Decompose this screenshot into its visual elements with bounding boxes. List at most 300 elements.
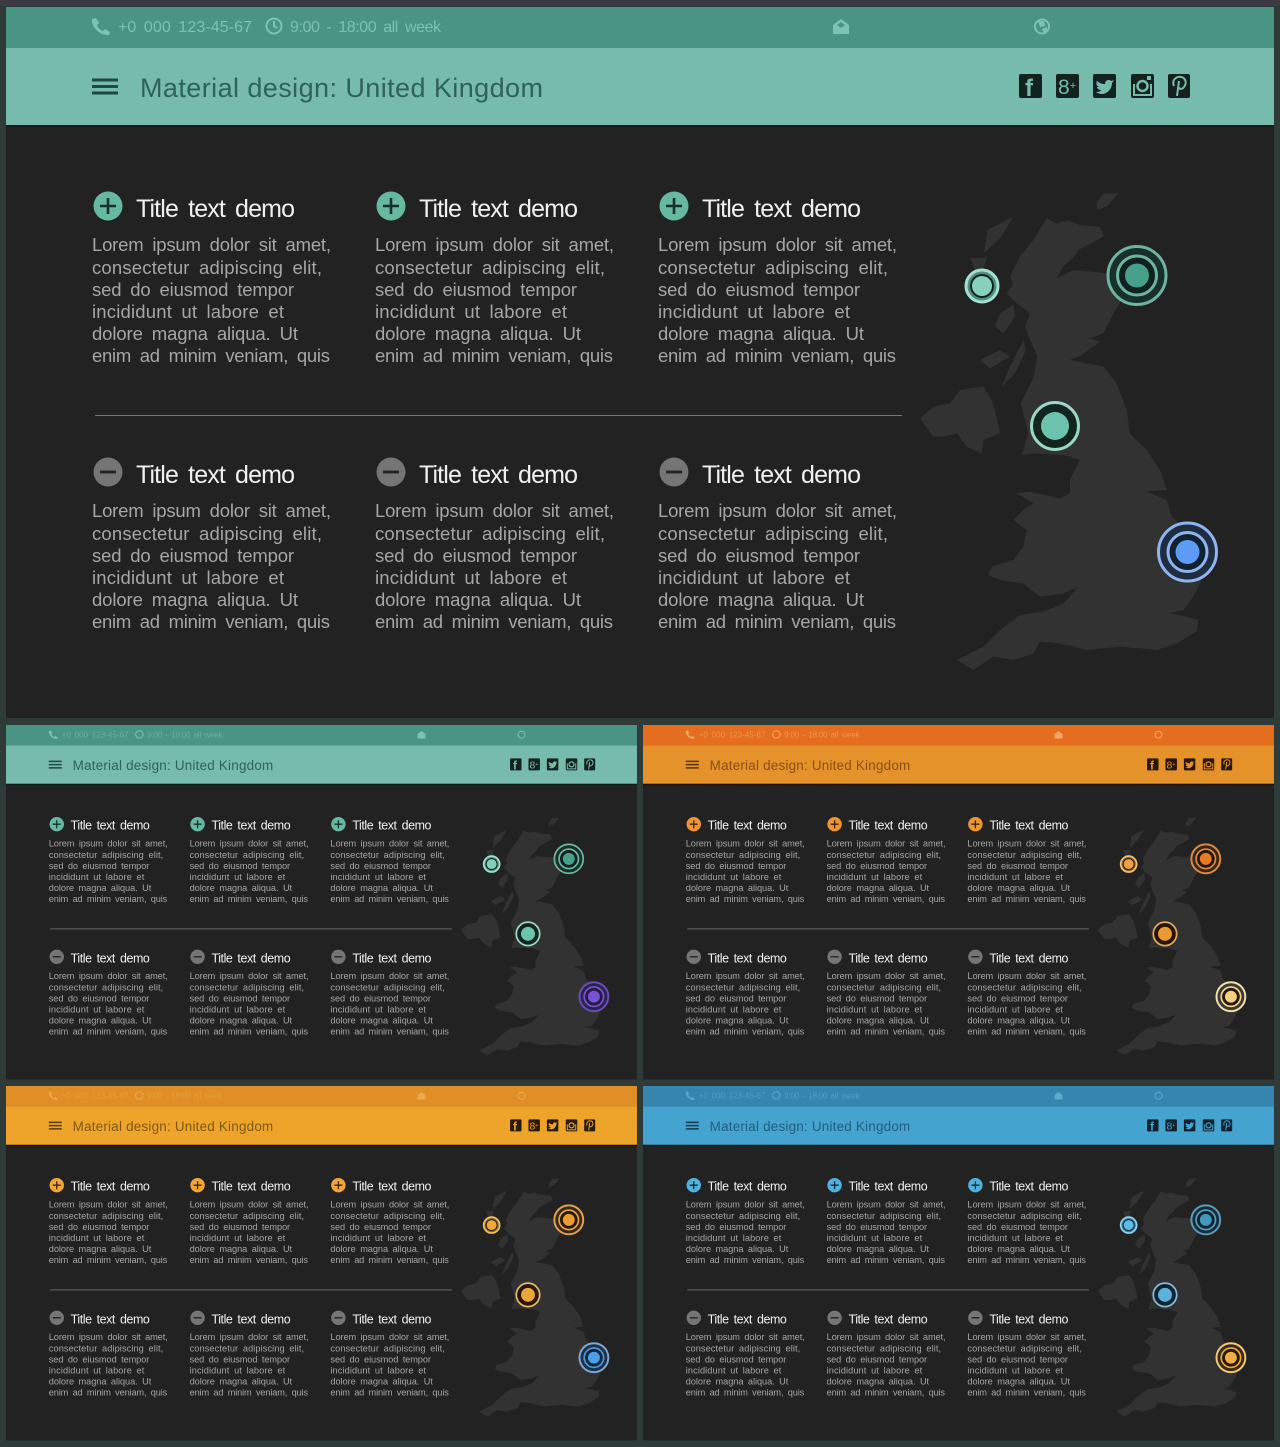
- text block: row 1 col 3: sed do eiusmod tempor: [330, 861, 431, 871]
- text block: row 2 col 1: dolore magna aliqua. Ut: [686, 1377, 789, 1387]
- header bar: Material design: United Kingdom: [73, 1119, 273, 1134]
- text block: row 2 col 1: sed do eiusmod tempor: [49, 994, 149, 1004]
- text block: row 1 col 3: incididunt ut labore et: [330, 872, 426, 882]
- text block: row 1 col 2: consectetur adipiscing elit,: [375, 257, 605, 278]
- text block: row 1 col 2: [190, 1178, 309, 1265]
- text block: row 2 col 3: incididunt ut labore et: [967, 1005, 1063, 1015]
- text block: row 2 col 3: enim ad minim veniam, quis: [967, 1388, 1086, 1398]
- text block: row 2 col 1: dolore magna aliqua. Ut: [686, 1016, 789, 1026]
- text block: row 1 col 1: incididunt ut labore et: [92, 301, 284, 322]
- text block: row 2 col 2: sed do eiusmod tempor: [827, 1355, 927, 1365]
- text block: row 1 col 2: [827, 1178, 946, 1265]
- text block: row 2 col 2: incididunt ut labore et: [190, 1005, 286, 1015]
- text block: row 1 col 2: incididunt ut labore et: [190, 872, 286, 882]
- text block: row 1 col 2: dolore magna aliqua. Ut: [375, 323, 581, 344]
- text block: row 2 col 2: enim ad minim veniam, quis: [827, 1027, 945, 1037]
- text block: row 2 col 1: consectetur adipiscing elit,: [49, 983, 163, 993]
- top contact bar: [643, 1086, 1274, 1106]
- text block: row 2 col 1: consectetur adipiscing elit,: [92, 523, 322, 544]
- text block: row 2 col 2: [827, 950, 946, 1037]
- text block: row 1 col 1: enim ad minim veniam, quis: [49, 1255, 168, 1265]
- text block: row 1 col 2: Title text demo: [849, 819, 928, 833]
- text block: row 1 col 1: dolore magna aliqua. Ut: [92, 323, 298, 344]
- text block: row 1 col 1: consectetur adipiscing elit,: [686, 1211, 800, 1221]
- text block: row 1 col 3: dolore magna aliqua. Ut: [967, 1244, 1070, 1254]
- text block: row 2 col 3: incididunt ut labore et: [330, 1005, 426, 1015]
- text block: row 2 col 3: sed do eiusmod tempor: [330, 1355, 431, 1365]
- panel: small amber slide: [6, 1086, 637, 1440]
- map markers: [484, 1205, 608, 1372]
- text block: row 2 col 1: Title text demo: [71, 951, 150, 965]
- text block: row 1 col 3: Title text demo: [989, 819, 1069, 833]
- text block: row 1 col 2: Title text demo: [419, 195, 578, 223]
- text block: row 2 col 1: dolore magna aliqua. Ut: [92, 589, 298, 610]
- text block: row 1 col 3: [658, 192, 897, 366]
- text block: row 2 col 2: [190, 950, 309, 1037]
- text block: row 2 col 1: [92, 458, 331, 632]
- text block: row 2 col 1: incididunt ut labore et: [686, 1366, 782, 1376]
- text block: row 2 col 1: incididunt ut labore et: [49, 1005, 145, 1015]
- text block: row 2 col 2: sed do eiusmod tempor: [190, 1355, 290, 1365]
- text block: row 1 col 2: dolore magna aliqua. Ut: [827, 883, 930, 893]
- text block: row 2 col 1: Title text demo: [708, 1312, 787, 1326]
- text block: row 1 col 3: Lorem ipsum dolor sit amet,: [967, 839, 1086, 849]
- text block: row 2 col 1: incididunt ut labore et: [92, 567, 284, 588]
- marker: East Anglia: [1158, 523, 1216, 581]
- text block: row 2 col 1: enim ad minim veniam, quis: [686, 1388, 805, 1398]
- text block: row 2 col 2: Title text demo: [849, 951, 928, 965]
- text block: row 1 col 2: Lorem ipsum dolor sit amet,: [190, 1200, 309, 1210]
- header bar: [6, 745, 637, 785]
- text block: row 1 col 1: Lorem ipsum dolor sit amet,: [49, 839, 168, 849]
- text block: row 2 col 3: Lorem ipsum dolor sit amet,: [330, 1332, 449, 1342]
- text block: row 1 col 3: incididunt ut labore et: [967, 1233, 1063, 1243]
- map of United Kingdom: [1098, 818, 1238, 1056]
- header bar: [6, 48, 1274, 127]
- text block: row 2 col 2: consectetur adipiscing elit,: [375, 523, 605, 544]
- text block: row 1 col 2: dolore magna aliqua. Ut: [190, 1244, 293, 1254]
- text block: row 2 col 3: consectetur adipiscing elit,: [967, 983, 1082, 993]
- text block: row 2 col 2: Title text demo: [419, 461, 578, 489]
- text block: row 2 col 3: [967, 1311, 1086, 1398]
- text block: row 1 col 2: Lorem ipsum dolor sit amet,: [827, 839, 946, 849]
- text block: row 1 col 3: dolore magna aliqua. Ut: [330, 1244, 433, 1254]
- text block: row 2 col 2: Lorem ipsum dolor sit amet,: [827, 971, 946, 981]
- text block: row 1 col 3: consectetur adipiscing elit,: [967, 1211, 1082, 1221]
- panel: small orange slide: [643, 725, 1274, 1079]
- social icons: +: [1172, 1123, 1175, 1129]
- social icons: 8: [1166, 760, 1172, 771]
- text block: row 2 col 2: sed do eiusmod tempor: [190, 994, 290, 1004]
- text block: row 2 col 3: [330, 1311, 449, 1398]
- text block: row 2 col 3: sed do eiusmod tempor: [330, 994, 431, 1004]
- text block: row 1 col 2: Lorem ipsum dolor sit amet,: [190, 839, 309, 849]
- text block: row 1 col 2: enim ad minim veniam, quis: [190, 894, 308, 904]
- text block: row 2 col 2: consectetur adipiscing elit,: [190, 983, 304, 993]
- text block: row 2 col 2: sed do eiusmod tempor: [375, 545, 577, 566]
- text block: row 2 col 3: incididunt ut labore et: [658, 567, 850, 588]
- text block: row 1 col 1: [49, 1178, 168, 1265]
- text block: row 2 col 3: Title text demo: [989, 1312, 1069, 1326]
- text block: row 1 col 2: Lorem ipsum dolor sit amet,: [375, 234, 614, 255]
- text block: row 1 col 1: enim ad minim veniam, quis: [686, 894, 805, 904]
- text block: row 1 col 1: sed do eiusmod tempor: [49, 861, 149, 871]
- top contact bar: +0 000 123-45-67: [699, 1091, 766, 1100]
- text block: row 2 col 2: incididunt ut labore et: [827, 1366, 923, 1376]
- text block: row 2 col 2: dolore magna aliqua. Ut: [190, 1377, 293, 1387]
- text block: row 1 col 1: Title text demo: [708, 1180, 787, 1194]
- text block: row 2 col 2: dolore magna aliqua. Ut: [827, 1016, 930, 1026]
- text block: row 1 col 2: consectetur adipiscing elit,: [827, 1211, 941, 1221]
- text block: row 2 col 3: sed do eiusmod tempor: [658, 545, 860, 566]
- text block: row 1 col 3: enim ad minim veniam, quis: [658, 345, 896, 366]
- text block: row 2 col 3: [330, 950, 449, 1037]
- text block: row 2 col 2: Lorem ipsum dolor sit amet,: [190, 1332, 309, 1342]
- text block: row 1 col 3: enim ad minim veniam, quis: [330, 1255, 449, 1265]
- text block: row 1 col 3: sed do eiusmod tempor: [967, 861, 1068, 871]
- text block: row 2 col 1: [49, 950, 168, 1037]
- social icons: f: [513, 1119, 517, 1133]
- text block: row 2 col 2: enim ad minim veniam, quis: [190, 1027, 308, 1037]
- text block: row 1 col 1: sed do eiusmod tempor: [92, 279, 294, 300]
- marker: west isles: [966, 270, 998, 302]
- text block: row 2 col 2: enim ad minim veniam, quis: [190, 1388, 308, 1398]
- panel: small teal and purple slide: [6, 725, 637, 1079]
- text block: row 1 col 3: dolore magna aliqua. Ut: [658, 323, 864, 344]
- text block: row 1 col 3: incididunt ut labore et: [967, 872, 1063, 882]
- text block: row 1 col 1: incididunt ut labore et: [686, 872, 782, 882]
- text block: row 2 col 2: [190, 1311, 309, 1398]
- header bar: Material design: United Kingdom: [73, 758, 273, 773]
- text block: row 1 col 1: Lorem ipsum dolor sit amet,: [686, 839, 805, 849]
- text block: row 2 col 3: consectetur adipiscing elit,: [330, 983, 445, 993]
- text block: row 2 col 1: [686, 1311, 805, 1398]
- text block: row 1 col 3: dolore magna aliqua. Ut: [967, 883, 1070, 893]
- text block: row 1 col 1: Lorem ipsum dolor sit amet,: [92, 234, 331, 255]
- text block: row 2 col 3: [658, 458, 897, 632]
- text block: row 2 col 3: Lorem ipsum dolor sit amet,: [658, 500, 897, 521]
- text block: row 2 col 3: Lorem ipsum dolor sit amet,: [967, 971, 1086, 981]
- text block: row 2 col 2: Lorem ipsum dolor sit amet,: [375, 500, 614, 521]
- text block: row 2 col 1: Lorem ipsum dolor sit amet,: [92, 500, 331, 521]
- text block: row 1 col 2: incididunt ut labore et: [375, 301, 567, 322]
- text block: row 1 col 1: Title text demo: [708, 819, 787, 833]
- text block: row 2 col 1: enim ad minim veniam, quis: [686, 1027, 805, 1037]
- text block: row 1 col 2: Title text demo: [849, 1180, 928, 1194]
- text block: row 2 col 3: Lorem ipsum dolor sit amet,: [967, 1332, 1086, 1342]
- text block: row 2 col 3: enim ad minim veniam, quis: [330, 1027, 449, 1037]
- header bar: [6, 1106, 637, 1146]
- text block: row 1 col 2: Title text demo: [212, 819, 291, 833]
- text block: row 1 col 1: Title text demo: [71, 1180, 150, 1194]
- text block: row 1 col 2: consectetur adipiscing elit,: [190, 1211, 304, 1221]
- text block: row 1 col 3: incididunt ut labore et: [658, 301, 850, 322]
- social icons: [1147, 1119, 1232, 1133]
- text block: row 2 col 2: Title text demo: [849, 1312, 928, 1326]
- text block: row 2 col 3: enim ad minim veniam, quis: [658, 611, 896, 632]
- text block: row 1 col 3: consectetur adipiscing elit,: [967, 850, 1082, 860]
- text block: row 2 col 1: Lorem ipsum dolor sit amet,: [686, 971, 805, 981]
- top contact bar: [6, 7, 1274, 48]
- text block: row 2 col 1: enim ad minim veniam, quis: [49, 1388, 168, 1398]
- text block: row 2 col 2: sed do eiusmod tempor: [827, 994, 927, 1004]
- text block: row 2 col 3: enim ad minim veniam, quis: [967, 1027, 1086, 1037]
- text block: row 2 col 1: dolore magna aliqua. Ut: [49, 1016, 152, 1026]
- text block: row 2 col 3: incididunt ut labore et: [330, 1366, 426, 1376]
- text block: row 2 col 3: consectetur adipiscing elit,: [967, 1344, 1082, 1354]
- text block: row 1 col 3: consectetur adipiscing elit,: [330, 1211, 445, 1221]
- text block: row 1 col 1: Lorem ipsum dolor sit amet,: [686, 1200, 805, 1210]
- text block: row 2 col 2: [375, 458, 614, 632]
- text block: row 2 col 1: sed do eiusmod tempor: [49, 1355, 149, 1365]
- text block: row 2 col 2: dolore magna aliqua. Ut: [827, 1377, 930, 1387]
- text block: row 1 col 1: consectetur adipiscing elit,: [49, 1211, 163, 1221]
- text block: row 1 col 2: sed do eiusmod tempor: [190, 861, 290, 871]
- top contact bar: [6, 1086, 637, 1106]
- text block: row 1 col 1: enim ad minim veniam, quis: [92, 345, 330, 366]
- text block: row 2 col 3: incididunt ut labore et: [967, 1366, 1063, 1376]
- text block: row 2 col 1: consectetur adipiscing elit,: [686, 983, 800, 993]
- text block: row 2 col 2: incididunt ut labore et: [827, 1005, 923, 1015]
- text block: row 2 col 3: consectetur adipiscing elit,: [330, 1344, 445, 1354]
- text block: row 2 col 1: Title text demo: [136, 461, 295, 489]
- text block: row 1 col 3: sed do eiusmod tempor: [967, 1222, 1068, 1232]
- text block: row 2 col 1: Title text demo: [71, 1312, 150, 1326]
- text block: row 1 col 2: Title text demo: [212, 1180, 291, 1194]
- top contact bar: +0 000 123-45-67: [118, 19, 252, 36]
- map markers: [1121, 844, 1245, 1011]
- text block: row 2 col 2: incididunt ut labore et: [190, 1366, 286, 1376]
- text block: row 2 col 3: consectetur adipiscing elit,: [658, 523, 888, 544]
- social icons: 8: [529, 1121, 535, 1132]
- text block: row 1 col 3: Lorem ipsum dolor sit amet,: [658, 234, 897, 255]
- text block: row 1 col 1: incididunt ut labore et: [686, 1233, 782, 1243]
- top contact bar: +0 000 123-45-67: [62, 730, 129, 739]
- text block: row 2 col 3: Title text demo: [989, 951, 1069, 965]
- text block: row 1 col 3: [967, 817, 1086, 904]
- text block: row 1 col 3: Title text demo: [352, 819, 432, 833]
- text block: row 2 col 2: dolore magna aliqua. Ut: [190, 1016, 293, 1026]
- text block: row 1 col 2: sed do eiusmod tempor: [827, 1222, 927, 1232]
- panel: main teal slide: [6, 7, 1274, 718]
- text block: row 1 col 3: enim ad minim veniam, quis: [967, 894, 1086, 904]
- text block: row 1 col 3: [330, 817, 449, 904]
- text block: row 2 col 3: Title text demo: [352, 951, 432, 965]
- text block: row 2 col 1: enim ad minim veniam, quis: [49, 1027, 168, 1037]
- header bar: [643, 1106, 1274, 1146]
- text block: row 2 col 3: dolore magna aliqua. Ut: [330, 1016, 433, 1026]
- social icons: 8: [1058, 76, 1070, 99]
- text block: row 2 col 1: Lorem ipsum dolor sit amet,: [49, 971, 168, 981]
- text block: row 1 col 2: enim ad minim veniam, quis: [827, 894, 945, 904]
- text block: row 2 col 2: consectetur adipiscing elit,: [827, 1344, 941, 1354]
- top contact bar: 9:00 - 18:00 all week: [784, 1091, 859, 1100]
- text block: row 1 col 1: dolore magna aliqua. Ut: [686, 883, 789, 893]
- map of United Kingdom: [920, 193, 1202, 670]
- text block: row 1 col 3: Lorem ipsum dolor sit amet,: [330, 1200, 449, 1210]
- text block: row 2 col 2: enim ad minim veniam, quis: [827, 1388, 945, 1398]
- text block: row 1 col 2: consectetur adipiscing elit,: [827, 850, 941, 860]
- text block: row 1 col 2: sed do eiusmod tempor: [190, 1222, 290, 1232]
- panel: small blue slide: [643, 1086, 1274, 1440]
- text block: row 1 col 2: Lorem ipsum dolor sit amet,: [827, 1200, 946, 1210]
- social icons: +: [535, 762, 538, 768]
- text block: row 2 col 1: enim ad minim veniam, quis: [92, 611, 330, 632]
- text block: row 1 col 2: sed do eiusmod tempor: [827, 861, 927, 871]
- text block: row 1 col 3: sed do eiusmod tempor: [330, 1222, 431, 1232]
- text block: row 2 col 1: incididunt ut labore et: [49, 1366, 145, 1376]
- text block: row 1 col 1: incididunt ut labore et: [49, 872, 145, 882]
- social icons: [510, 1119, 595, 1133]
- text block: row 1 col 3: Title text demo: [352, 1180, 432, 1194]
- top contact bar: [643, 725, 1274, 745]
- text block: row 1 col 3: incididunt ut labore et: [330, 1233, 426, 1243]
- text block: row 2 col 3: dolore magna aliqua. Ut: [967, 1016, 1070, 1026]
- text block: row 1 col 3: Lorem ipsum dolor sit amet,: [330, 839, 449, 849]
- text block: row 1 col 1: [49, 817, 168, 904]
- text block: row 2 col 2: [827, 1311, 946, 1398]
- text block: row 2 col 1: incididunt ut labore et: [686, 1005, 782, 1015]
- text block: row 1 col 2: [190, 817, 309, 904]
- social icons: +: [1070, 80, 1076, 92]
- text block: row 1 col 3: consectetur adipiscing elit,: [330, 850, 445, 860]
- text block: row 1 col 1: incididunt ut labore et: [49, 1233, 145, 1243]
- text block: row 1 col 1: sed do eiusmod tempor: [49, 1222, 149, 1232]
- text block: row 2 col 1: [686, 950, 805, 1037]
- map of United Kingdom: [1098, 1179, 1238, 1417]
- text block: row 1 col 1: enim ad minim veniam, quis: [686, 1255, 805, 1265]
- map markers: [1121, 1205, 1245, 1372]
- text block: row 2 col 3: [967, 950, 1086, 1037]
- text block: row 1 col 3: [967, 1178, 1086, 1265]
- text block: row 1 col 1: consectetur adipiscing elit,: [686, 850, 800, 860]
- text block: row 1 col 3: enim ad minim veniam, quis: [967, 1255, 1086, 1265]
- marker: north-west England: [1032, 402, 1078, 450]
- text block: row 1 col 3: Lorem ipsum dolor sit amet,: [967, 1200, 1086, 1210]
- text block: row 2 col 3: Title text demo: [352, 1312, 432, 1326]
- text block: row 2 col 1: sed do eiusmod tempor: [686, 1355, 786, 1365]
- top contact bar: +0 000 123-45-67: [699, 730, 766, 739]
- text block: row 1 col 2: sed do eiusmod tempor: [375, 279, 577, 300]
- social icons: +: [1172, 762, 1175, 768]
- text block: row 1 col 2: incididunt ut labore et: [827, 1233, 923, 1243]
- social icons: f: [1150, 758, 1154, 772]
- text block: row 2 col 2: Title text demo: [212, 951, 291, 965]
- text block: row 2 col 2: Title text demo: [212, 1312, 291, 1326]
- header bar: [643, 745, 1274, 785]
- text block: row 1 col 2: dolore magna aliqua. Ut: [827, 1244, 930, 1254]
- text block: row 2 col 2: dolore magna aliqua. Ut: [375, 589, 581, 610]
- text block: row 2 col 3: dolore magna aliqua. Ut: [658, 589, 864, 610]
- text block: row 1 col 2: dolore magna aliqua. Ut: [190, 883, 293, 893]
- text block: row 1 col 1: dolore magna aliqua. Ut: [49, 883, 152, 893]
- text block: row 2 col 2: consectetur adipiscing elit,: [190, 1344, 304, 1354]
- social icons: [1019, 74, 1190, 102]
- header bar: Material design: United Kingdom: [710, 1119, 910, 1134]
- text block: row 1 col 1: dolore magna aliqua. Ut: [49, 1244, 152, 1254]
- text block: row 2 col 2: consectetur adipiscing elit,: [827, 983, 941, 993]
- text block: row 1 col 1: sed do eiusmod tempor: [686, 1222, 786, 1232]
- social icons: [1147, 758, 1232, 772]
- text block: row 2 col 3: dolore magna aliqua. Ut: [967, 1377, 1070, 1387]
- social icons: 8: [529, 760, 535, 771]
- text block: row 2 col 1: consectetur adipiscing elit,: [686, 1344, 800, 1354]
- text block: row 2 col 3: sed do eiusmod tempor: [967, 1355, 1068, 1365]
- map markers: [484, 844, 608, 1011]
- text block: row 1 col 1: Title text demo: [71, 819, 150, 833]
- text block: row 1 col 3: Title text demo: [989, 1180, 1069, 1194]
- top contact bar: 9:00 - 18:00 all week: [784, 730, 859, 739]
- header bar: Material design: United Kingdom: [710, 758, 910, 773]
- text block: row 1 col 1: consectetur adipiscing elit,: [49, 850, 163, 860]
- social icons: +: [535, 1123, 538, 1129]
- text block: row 1 col 1: [686, 1178, 805, 1265]
- text block: row 1 col 1: dolore magna aliqua. Ut: [686, 1244, 789, 1254]
- social icons: [510, 758, 595, 772]
- top contact bar: 9:00 - 18:00 all week: [290, 19, 442, 36]
- text block: row 2 col 1: Lorem ipsum dolor sit amet,: [49, 1332, 168, 1342]
- text block: row 1 col 3: sed do eiusmod tempor: [658, 279, 860, 300]
- text block: row 1 col 2: incididunt ut labore et: [190, 1233, 286, 1243]
- text block: row 1 col 1: Title text demo: [136, 195, 295, 223]
- text block: row 2 col 1: [49, 1311, 168, 1398]
- text block: row 1 col 3: enim ad minim veniam, quis: [330, 894, 449, 904]
- text block: row 2 col 1: Lorem ipsum dolor sit amet,: [686, 1332, 805, 1342]
- text block: row 2 col 2: Lorem ipsum dolor sit amet,: [190, 971, 309, 981]
- top contact bar: 9:00 - 18:00 all week: [147, 1091, 222, 1100]
- text block: row 2 col 1: dolore magna aliqua. Ut: [49, 1377, 152, 1387]
- text block: row 1 col 1: sed do eiusmod tempor: [686, 861, 786, 871]
- text block: row 1 col 1: consectetur adipiscing elit,: [92, 257, 322, 278]
- text block: row 2 col 2: incididunt ut labore et: [375, 567, 567, 588]
- marker: north-east Scotland: [1108, 246, 1166, 304]
- header bar: Material design: United Kingdom: [140, 73, 543, 103]
- text block: row 2 col 3: dolore magna aliqua. Ut: [330, 1377, 433, 1387]
- text block: row 1 col 2: incididunt ut labore et: [827, 872, 923, 882]
- text block: row 1 col 1: [686, 817, 805, 904]
- text block: row 2 col 1: sed do eiusmod tempor: [92, 545, 294, 566]
- text block: row 2 col 1: sed do eiusmod tempor: [686, 994, 786, 1004]
- text block: row 1 col 3: dolore magna aliqua. Ut: [330, 883, 433, 893]
- social icons: f: [1025, 75, 1034, 102]
- top contact bar: 9:00 - 18:00 all week: [147, 730, 222, 739]
- map of United Kingdom: [461, 818, 601, 1056]
- social icons: 8: [1166, 1121, 1172, 1132]
- text block: row 1 col 2: enim ad minim veniam, quis: [190, 1255, 308, 1265]
- text block: row 1 col 1: Lorem ipsum dolor sit amet,: [49, 1200, 168, 1210]
- text block: row 1 col 1: enim ad minim veniam, quis: [49, 894, 168, 904]
- text block: row 2 col 2: Lorem ipsum dolor sit amet,: [827, 1332, 946, 1342]
- text block: row 1 col 1: [92, 192, 331, 366]
- map of United Kingdom: [461, 1179, 601, 1417]
- text block: row 2 col 3: Title text demo: [702, 461, 861, 489]
- text block: row 1 col 2: [827, 817, 946, 904]
- text block: row 2 col 3: sed do eiusmod tempor: [967, 994, 1068, 1004]
- text block: row 1 col 3: [330, 1178, 449, 1265]
- text block: row 1 col 2: consectetur adipiscing elit,: [190, 850, 304, 860]
- text block: row 1 col 2: enim ad minim veniam, quis: [375, 345, 613, 366]
- text block: row 1 col 3: consectetur adipiscing elit,: [658, 257, 888, 278]
- top contact bar: +0 000 123-45-67: [62, 1091, 129, 1100]
- text block: row 2 col 1: Title text demo: [708, 951, 787, 965]
- text block: row 1 col 3: Title text demo: [702, 195, 861, 223]
- text block: row 2 col 3: enim ad minim veniam, quis: [330, 1388, 449, 1398]
- text block: row 2 col 3: Lorem ipsum dolor sit amet,: [330, 971, 449, 981]
- text block: row 1 col 2: enim ad minim veniam, quis: [827, 1255, 945, 1265]
- text block: row 2 col 2: enim ad minim veniam, quis: [375, 611, 613, 632]
- social icons: f: [1150, 1119, 1154, 1133]
- top contact bar: [6, 725, 637, 745]
